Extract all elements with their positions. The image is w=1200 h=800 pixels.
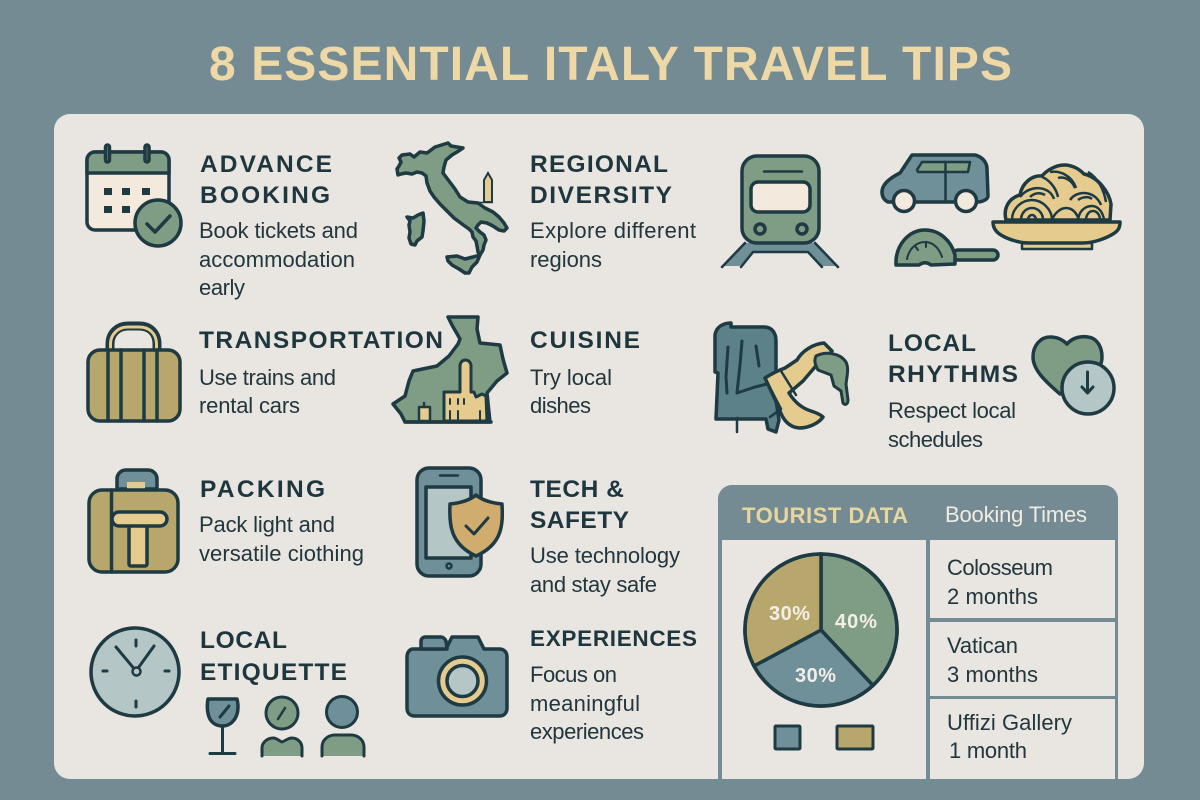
heading: PACKING — [200, 476, 325, 503]
icon: wine glass — [207, 699, 238, 754]
heading: TRANSPORTATION — [199, 327, 443, 354]
description: Pack light and — [199, 512, 335, 537]
cell: uffizi gallery: 1 month — [949, 738, 1027, 763]
description: Try local — [530, 365, 612, 390]
pie chart: 30% — [795, 665, 836, 687]
cell: vatican: 3 months — [947, 662, 1038, 687]
description — [530, 365, 612, 418]
legend swatches — [775, 726, 873, 749]
description: versatile ciothing — [199, 541, 364, 566]
heading: ADVANCE — [200, 151, 332, 178]
description: and stay safe — [530, 572, 657, 597]
cell: colosseum: 2 months — [947, 584, 1038, 609]
description: meaningful — [530, 691, 640, 716]
icon: pasta plate — [993, 165, 1120, 249]
tip: local etiquette — [91, 627, 364, 756]
icon: coat and scarf — [715, 323, 848, 432]
tip: packing — [89, 470, 364, 572]
icon: train — [722, 156, 838, 267]
icon: heart and clock — [1033, 337, 1114, 414]
icon: person two — [322, 696, 364, 756]
tip: local rhythms — [888, 330, 1114, 452]
heading line 2: DIVERSITY — [530, 182, 672, 209]
heading: CUISINE — [530, 327, 640, 354]
pie chart: 40% — [835, 611, 877, 633]
heading: TECH & — [530, 476, 624, 503]
tip: transportation — [88, 326, 443, 421]
heading: LOCAL — [200, 627, 287, 654]
description: Focus on — [530, 662, 617, 687]
description: early — [199, 275, 245, 300]
description: rental cars — [199, 393, 300, 418]
icon: wall clock — [91, 628, 179, 716]
cell: uffizi gallery: Uffizi Gallery — [947, 710, 1072, 735]
description — [530, 543, 680, 597]
description — [199, 365, 336, 418]
description: regions — [530, 247, 602, 272]
description: Use technology — [530, 543, 680, 568]
icon: camera — [407, 637, 507, 716]
description: dishes — [530, 393, 591, 418]
panel heading: booking times: Booking Times — [945, 502, 1087, 527]
cell: vatican — [930, 622, 1115, 696]
pie chart — [745, 554, 897, 706]
description: schedules — [888, 427, 983, 452]
tip: experiences — [407, 626, 697, 744]
panel: tourist data — [718, 485, 1118, 779]
title: 8 ESSENTIAL ITALY TRAVEL TIPS — [209, 38, 1012, 91]
heading line 2: RHYTHMS — [888, 361, 1018, 388]
heading line 2: BOOKING — [200, 182, 330, 209]
panel: main card — [54, 114, 1144, 779]
pie chart: 30% — [769, 603, 810, 625]
description: Explore different — [530, 218, 696, 243]
description: experiences — [530, 719, 644, 744]
icon: gauge with handle — [896, 230, 998, 265]
icon: Italy map — [397, 143, 507, 273]
description — [199, 218, 358, 300]
icon: calendar with check — [87, 145, 181, 246]
description — [888, 398, 1016, 452]
heading: EXPERIENCES — [530, 626, 697, 651]
description — [530, 218, 696, 272]
tip: cuisine — [393, 317, 640, 422]
icon: phone with shield — [417, 468, 502, 576]
description — [199, 512, 364, 566]
heading: REGIONAL — [530, 151, 668, 178]
description: Book tickets and — [199, 218, 358, 243]
description: accommodation — [199, 247, 355, 272]
heading: LOCAL — [888, 330, 976, 357]
description: Respect local — [888, 398, 1016, 423]
heading line 2: ETIQUETTE — [200, 659, 347, 686]
tip: advance booking — [87, 145, 358, 300]
description — [530, 662, 644, 744]
icon: travel bag — [89, 470, 178, 572]
cell: colosseum — [930, 540, 1115, 618]
icon: car — [882, 155, 988, 212]
cell: uffizi gallery — [930, 699, 1115, 779]
heading line 2: SAFETY — [530, 507, 629, 534]
cell: colosseum: Colosseum — [947, 555, 1053, 580]
tip: regional diversity — [397, 143, 696, 273]
tip: tech and safety — [417, 468, 680, 597]
icon: suitcase — [88, 326, 180, 421]
panel heading: tourist data: TOURIST DATA — [742, 503, 908, 528]
cell: vatican: Vatican — [947, 633, 1018, 658]
description: Use trains and — [199, 365, 336, 390]
icon: region map with buildings — [393, 317, 507, 422]
icon: person one — [262, 697, 302, 756]
